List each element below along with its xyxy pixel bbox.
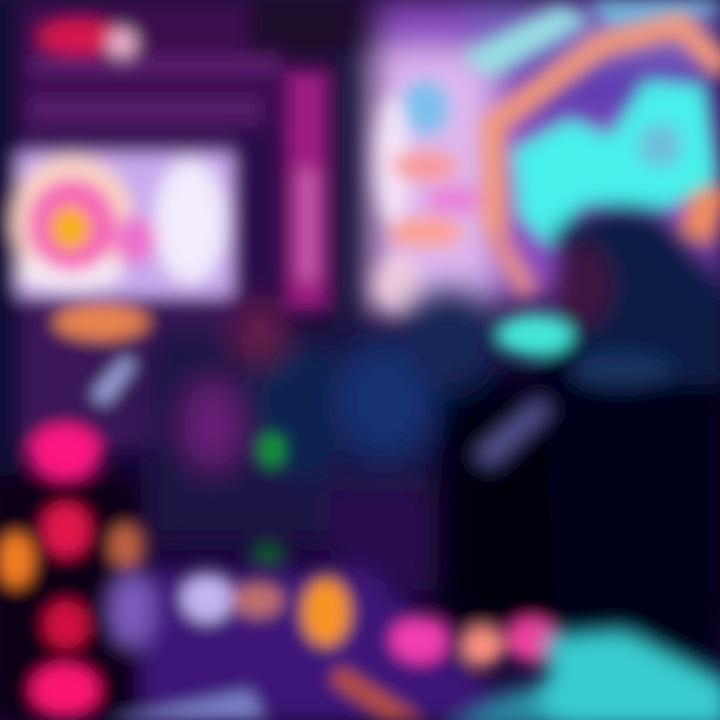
panel: ceiling and left wall [0,0,460,720]
panel: central crowd [150,298,450,590]
icon: orange sign [54,304,150,405]
panel: mural wall [372,0,720,315]
panel: left screen [10,152,234,298]
panel: pillars [238,50,370,340]
icon: green indicator [252,434,284,567]
icon: cyan counter light [440,628,720,720]
icon: cyan glowing shape [512,80,718,250]
panel: traffic light lamps [0,424,145,720]
panel: foreground figures [335,208,720,720]
icon: orange hexagon outline [492,25,720,295]
panel: bottom counter [106,570,558,720]
